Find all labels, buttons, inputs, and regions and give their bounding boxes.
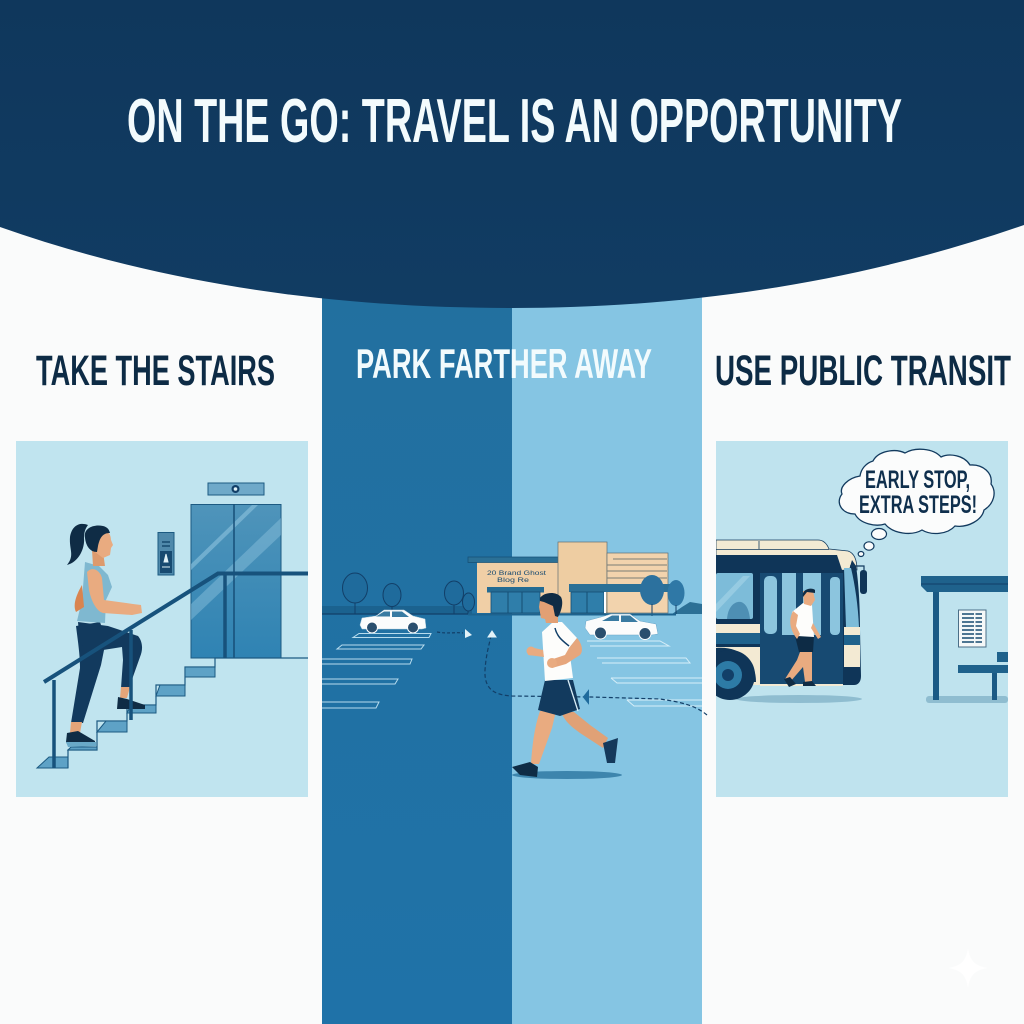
car: right (585, 614, 658, 640)
wheel (716, 648, 756, 700)
trees (342, 573, 702, 616)
parking lot scene (322, 542, 707, 779)
header banner (0, 0, 1024, 308)
front leg (531, 711, 556, 764)
shorts (538, 680, 580, 716)
thought bubble: EARLY STOP, (865, 466, 970, 494)
bus shelter (921, 576, 1008, 703)
front leg (78, 622, 142, 688)
hair (85, 526, 110, 552)
back leg (71, 622, 106, 723)
panel: stairs illustration (16, 441, 308, 797)
thought bubble (839, 449, 994, 556)
back leg (561, 712, 608, 748)
icon: elevator doors (191, 504, 281, 658)
icon: sparkle watermark (948, 948, 988, 988)
building: 20 Brand Ghost (487, 571, 546, 577)
man stepping off bus (784, 589, 821, 687)
heading: park farther away: PARK FARTHER AWAY (356, 340, 652, 387)
icon: elevator call panel (158, 532, 174, 575)
runner shadow (512, 771, 622, 779)
panel: park farther away column (322, 290, 702, 1024)
parking space lines (322, 634, 702, 708)
arrow: walking path (437, 629, 707, 715)
horizon band (322, 606, 472, 614)
bus (705, 540, 867, 700)
bench (958, 652, 1008, 700)
head (539, 600, 558, 623)
handrail (44, 574, 308, 768)
bus shadow (736, 695, 862, 703)
ground line (322, 613, 468, 615)
arms (528, 647, 544, 657)
building (468, 542, 673, 613)
woman climbing stairs (66, 524, 145, 747)
neck and face (92, 550, 105, 566)
building: Blog Re (497, 578, 530, 584)
staircase (37, 658, 308, 768)
man jogging (512, 593, 618, 777)
arm (87, 569, 142, 615)
heading: take the stairs: TAKE THE STAIRS (36, 347, 275, 395)
icon: elevator sign (208, 483, 264, 495)
panel: public transit illustration (705, 441, 1008, 797)
car: left (360, 610, 426, 633)
torso (77, 562, 112, 623)
shirt (542, 622, 577, 681)
timetable notice (958, 610, 986, 647)
